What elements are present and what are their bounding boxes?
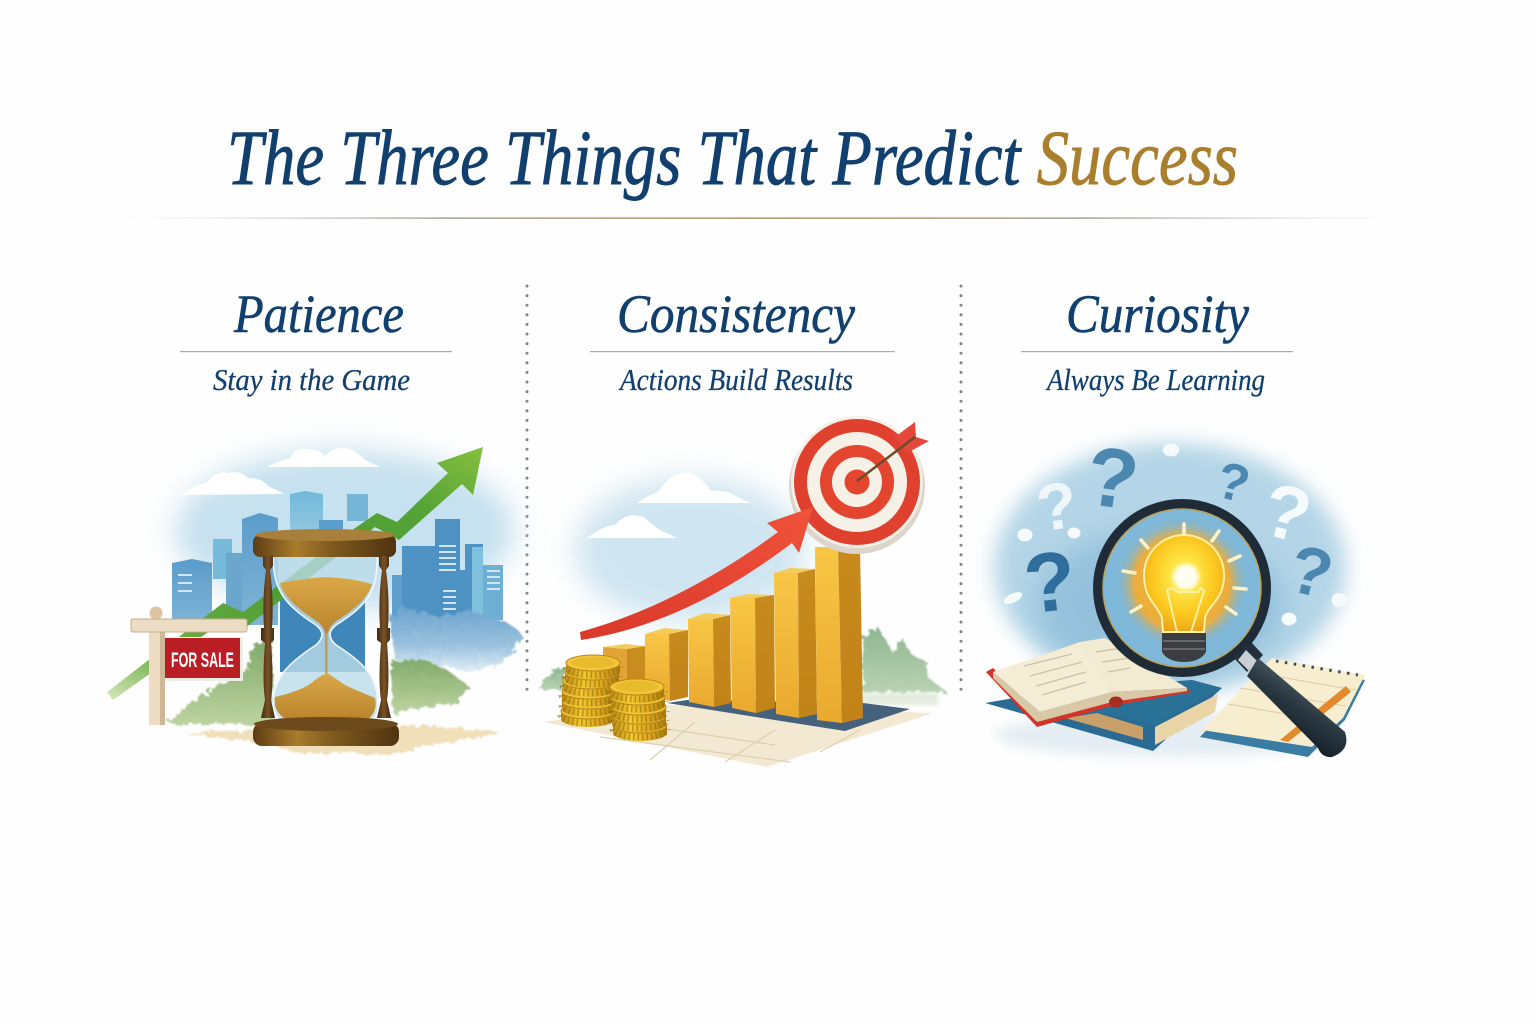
right post — [377, 556, 391, 718]
subheading: Stay in the Game: Stay in the Game — [213, 362, 410, 397]
left post — [261, 556, 275, 718]
bottom sand — [275, 673, 376, 720]
green bushes — [167, 640, 470, 725]
magnifying glass — [1098, 504, 1346, 757]
target — [789, 416, 929, 554]
sandy ground — [185, 725, 500, 753]
red growth arrow — [580, 507, 813, 640]
bar 6 — [815, 546, 863, 723]
lens — [1103, 509, 1261, 667]
bar 1 — [603, 644, 645, 700]
divider: right — [960, 286, 962, 690]
question marks: ? — [1254, 467, 1320, 560]
divider: left — [526, 286, 528, 690]
question marks: ? — [1019, 533, 1080, 631]
for sale sign — [131, 606, 247, 725]
blue foliage — [390, 608, 524, 672]
top cap — [253, 535, 396, 557]
question marks: ? — [1211, 451, 1255, 515]
dart — [857, 422, 929, 481]
trees — [537, 625, 947, 705]
city buildings — [172, 513, 503, 672]
coin stack: left — [561, 655, 620, 727]
title: The Three Things That Predict Success — [227, 114, 1238, 201]
top sand — [280, 577, 372, 633]
question marks: ? — [1282, 530, 1340, 614]
falling sand — [325, 633, 328, 673]
blue book stack — [985, 680, 1222, 751]
subheading: Always Be Learning: Always Be Learning — [1045, 362, 1265, 397]
illustration: hourglass and city — [107, 447, 524, 753]
dark floor shadow — [667, 700, 910, 731]
bar 3 — [688, 613, 731, 707]
subheading: Actions Build Results: Actions Build Results — [618, 362, 853, 397]
heading: Curiosity: Curiosity — [1066, 284, 1249, 344]
panel: Curiosity — [985, 284, 1365, 757]
coin stack: right — [610, 679, 667, 741]
watercolor blob — [994, 443, 1346, 757]
question marks: ? — [1032, 467, 1082, 545]
heading: Patience: Patience — [233, 284, 404, 344]
illustration: bars and target — [537, 416, 947, 767]
pencil — [1280, 686, 1351, 742]
back buildings — [290, 491, 368, 532]
sky wash — [175, 450, 515, 610]
bar 4 — [730, 594, 775, 713]
bar 2 — [645, 628, 688, 701]
hourglass — [253, 529, 399, 746]
clouds — [587, 473, 750, 538]
illustration: lightbulb and books — [985, 428, 1365, 757]
panel: Consistency — [537, 284, 947, 767]
glass — [273, 556, 378, 722]
sign text: FOR SALE — [171, 649, 234, 672]
bulb — [1144, 535, 1224, 632]
white dots — [1002, 444, 1346, 626]
clouds — [180, 448, 380, 495]
open book — [986, 638, 1192, 727]
bulb base — [1162, 633, 1206, 662]
heading: Consistency: Consistency — [617, 284, 855, 344]
rays — [1123, 524, 1246, 614]
sky wash — [575, 478, 805, 622]
question marks — [1019, 428, 1340, 631]
question marks: ? — [1080, 428, 1144, 528]
ring — [1098, 504, 1266, 672]
bar 5 — [774, 568, 817, 718]
handle — [1233, 643, 1346, 757]
bar chart — [603, 546, 863, 723]
base — [253, 723, 399, 746]
notebook — [1200, 658, 1365, 757]
rising green arrow — [107, 447, 483, 700]
panel: Patience — [107, 284, 524, 753]
floor map — [543, 705, 933, 767]
